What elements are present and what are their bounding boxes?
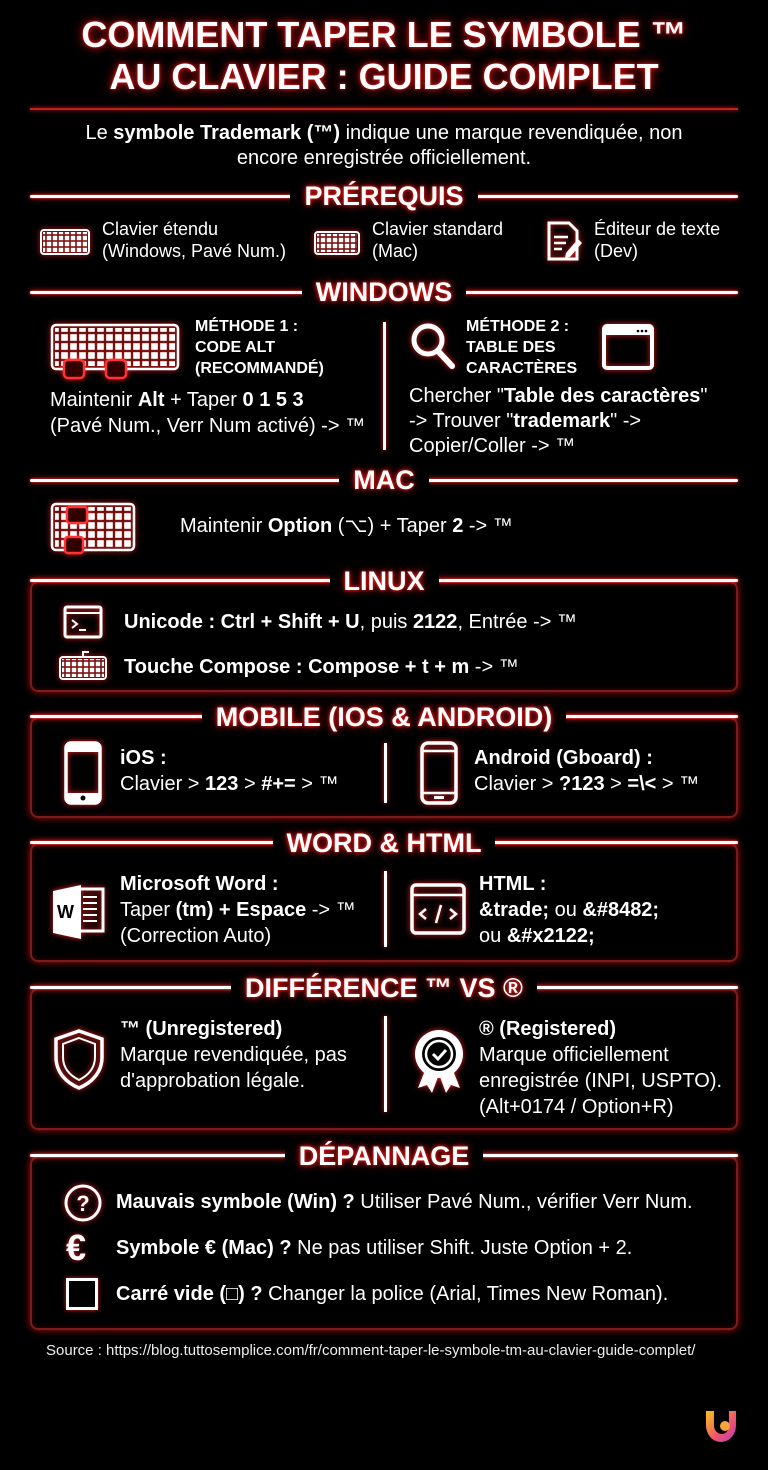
icon: badge [410,1026,468,1096]
icon: iphone [60,736,106,810]
heading: dépannage [26,1136,742,1172]
panel: windows method 1: Maintenir Alt + Taper 0 1 5 3 [50,389,304,411]
panel: word & html: (Correction Auto) [120,925,271,947]
panel: windows method 1: (Pavé Num., Verr Num activé) -> ™ [50,415,365,437]
panel: mobile: Clavier > 123 > #+= > ™ [120,773,338,795]
panel: windows method 1: (RECOMMANDÉ) [195,360,324,377]
panel: word & html: HTML : [479,873,546,895]
panel: mobile [30,717,738,818]
panel: prérequis: Clavier étendu [102,219,218,239]
icon: keyboard 1 [35,224,95,260]
panel: difference tm vs r: d'approbation légale. [120,1070,305,1092]
panel: linux [30,581,738,692]
heading: word & html [26,827,742,858]
title: COMMENT TAPER LE SYMBOLE ™ [81,14,687,55]
icon: html code [406,878,470,940]
panel: windows method 2: CARACTÈRES [466,360,577,377]
panel: dépannage [30,1156,738,1330]
panel: dépannage: Carré vide (□) ? Changer la police (Arial, Times New Roman). [116,1283,668,1305]
icon: keyboard 2 [309,226,365,260]
panel: windows method 2: MÉTHODE 2 : [466,318,569,335]
icon: terminal [58,600,108,644]
panel: mac [46,498,513,559]
panel: difference tm vs r: (Alt+0174 / Option+R) [479,1096,674,1118]
icon: magnifier [407,319,459,373]
panel: prérequis: (Mac) [372,241,418,261]
icon: window [597,319,659,375]
heading: word & html: WORD & HTML [287,828,481,858]
icon: question [60,1180,106,1226]
heading: mobile: MOBILE (IOS & ANDROID) [216,702,552,732]
panel: difference tm vs r: ® (Registered) [479,1018,616,1040]
panel: word & html: Taper (tm) + Espace -> ™ [120,899,356,921]
panel: linux: Unicode : Ctrl + Shift + U, puis 2122, Entrée -> ™ [124,611,577,633]
heading: dépannage: DÉPANNAGE [299,1141,469,1171]
panel: prérequis [35,216,720,266]
icon: text editor [542,216,586,266]
panel: difference tm vs r: ™ (Unregistered) [120,1018,282,1040]
panel: windows method 1: MÉTHODE 1 : [195,318,298,335]
panel: prérequis: (Windows, Pavé Num.) [102,241,286,261]
heading: prérequis [26,176,742,216]
panel: word & html [30,843,738,962]
heading: linux: LINUX [344,566,424,596]
panel: word & html: Microsoft Word : [120,873,279,895]
panel: windows method 2: Copier/Coller -> ™ [409,435,575,457]
panel: difference tm vs r: Marque officiellement [479,1044,669,1066]
panel: windows method 2: TABLE DES [466,339,555,356]
icon: keyboard [54,646,112,684]
panel: dépannage: Mauvais symbole (Win) ? Utiliser Pavé Num., vérifier Verr Num. [116,1191,693,1213]
icon: empty square [66,1278,98,1310]
intro text: encore enregistrée officiellement. [237,147,531,169]
panel: windows method 1 [46,317,365,437]
heading: mobile [26,701,742,736]
panel: mobile: Clavier > ?123 > =\< > ™ [474,773,699,795]
panel: mac: Maintenir Option (⌥) + Taper 2 -> ™ [180,515,513,537]
heading: linux [26,566,742,596]
icon: mac keyboard [46,498,140,559]
panel: linux: Touche Compose : Compose + t + m -> ™ [124,656,519,678]
panel: windows method 1: CODE ALT [195,339,275,356]
panel: prérequis: Éditeur de texte [594,219,720,239]
icon: logo [706,1411,736,1442]
panel: dépannage: Symbole € (Mac) ? Ne pas utiliser Shift. Juste Option + 2. [116,1237,632,1259]
icon: keyboard with highlighted keys [46,319,184,384]
heading: windows [26,276,742,308]
title [75,14,690,98]
title: AU CLAVIER : GUIDE COMPLET [109,56,659,97]
panel: difference tm vs r [30,988,738,1130]
icon: word: W [57,902,74,922]
intro text: Le symbole Trademark (™) indique une marque revendiquée, non [85,122,683,144]
heading: windows: WINDOWS [316,277,452,307]
panel: prérequis: Clavier standard [372,219,503,239]
heading: difference [26,968,742,1004]
panel: mobile: iOS : [120,747,167,769]
heading: mac [26,464,742,496]
panel: difference tm vs r: enregistrée (INPI, USPTO). [479,1070,722,1092]
panel: windows method 2 [407,317,707,457]
heading: mac: MAC [353,465,415,495]
icon: android [416,736,462,810]
heading: prérequis: PRÉREQUIS [304,181,464,211]
panel: mobile: Android (Gboard) : [474,747,653,769]
icon: word [48,881,110,943]
panel: prérequis: (Dev) [594,241,638,261]
source text: Source : https://blog.tuttosemplice.com/fr/comment-taper-le-symbole-tm-au-clavier-guide-complet/ [46,1342,695,1359]
panel: windows method 2: -> Trouver "trademark" -> [409,410,641,432]
heading: difference: DIFFÉRENCE ™ VS ® [245,973,523,1003]
panel: difference tm vs r: Marque revendiquée, pas [120,1044,347,1066]
panel: windows method 2: Chercher "Table des caractères" [409,385,707,407]
icon: euro: € [66,1227,86,1268]
icon: question: ? [76,1191,90,1216]
panel: word & html: ou &#x2122; [479,925,595,947]
panel: word & html: &trade; ou &#8482; [479,899,659,921]
intro text [85,122,683,169]
icon: shield [50,1025,108,1094]
